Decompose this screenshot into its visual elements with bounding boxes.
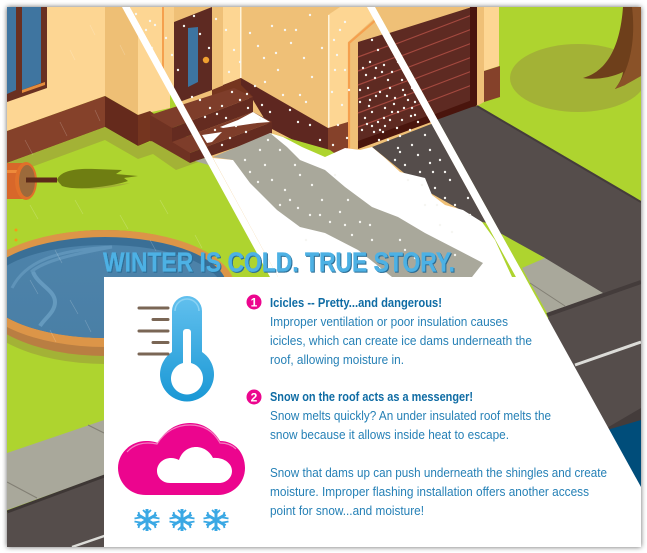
right column (328, 7, 381, 153)
snow ground (213, 133, 512, 277)
driveway (372, 124, 486, 223)
entry wall column (130, 7, 242, 88)
grass under snow (270, 133, 525, 277)
garage door (358, 34, 430, 149)
section 2: Snow melts quickly? An under insulated roof melts the (270, 408, 551, 423)
front door (174, 7, 212, 104)
section 2: Snow on the roof acts as a messenger! (270, 389, 473, 404)
falling snow (136, 14, 470, 262)
section 2: moisture. Improper flashing installation offers another access (270, 484, 589, 499)
driveway (438, 106, 641, 428)
number badge 1: 1 (251, 296, 258, 310)
house and garage (375, 7, 500, 121)
section 1: roof, allowing moisture in. (270, 352, 404, 367)
divider: left white slash (122, 7, 279, 277)
number badge 2: 2 (251, 390, 258, 404)
road stripe (575, 342, 641, 365)
sidewalk (7, 418, 110, 510)
grass shadow (7, 127, 198, 170)
sidewalk (522, 258, 603, 313)
potted plant (7, 162, 138, 200)
icon: thermometer (139, 296, 214, 401)
brick base (7, 96, 190, 163)
rain (25, 25, 202, 342)
section 1: icicles, which can create ice dams underneath the (270, 333, 532, 348)
divider: right white slash (367, 7, 525, 277)
section 1: Icicles -- Pretty...and dangerous! (270, 295, 442, 310)
section 1: Improper ventilation or poor insulation causes (270, 314, 508, 329)
orange dots (14, 228, 18, 242)
panel: rainy left scene (7, 7, 270, 547)
section 2: Snow that dams up can push underneath the shingles and create (270, 465, 607, 480)
house wall (7, 7, 105, 131)
section 2: point for snow...and moisture! (270, 503, 424, 518)
curb (547, 282, 641, 315)
pool (0, 230, 237, 364)
icon: cloud (118, 423, 245, 495)
section 2 (246, 389, 607, 518)
steps (183, 88, 272, 156)
section 2: snow because it allows inside heat to escape. (270, 427, 509, 442)
number badge 1 (246, 294, 262, 310)
section 1 (246, 294, 532, 367)
walkway (213, 133, 483, 277)
number badge 2 (246, 390, 262, 404)
tree and shadow (510, 7, 646, 112)
temperature ticks (139, 308, 168, 354)
street (7, 474, 110, 547)
road edge and water (608, 408, 641, 430)
grass strip (501, 234, 545, 266)
window (7, 7, 47, 102)
panel: right yard scene (375, 7, 641, 487)
icon: snowflakes (134, 509, 228, 531)
title: WINTER IS COLD. TRUE STORY. (103, 246, 455, 278)
steps (151, 106, 205, 163)
panel: white content (104, 277, 641, 547)
wall base (223, 78, 328, 150)
snow on steps (202, 112, 270, 143)
panel: snowy middle scene (120, 7, 525, 277)
walkway start (195, 158, 209, 166)
